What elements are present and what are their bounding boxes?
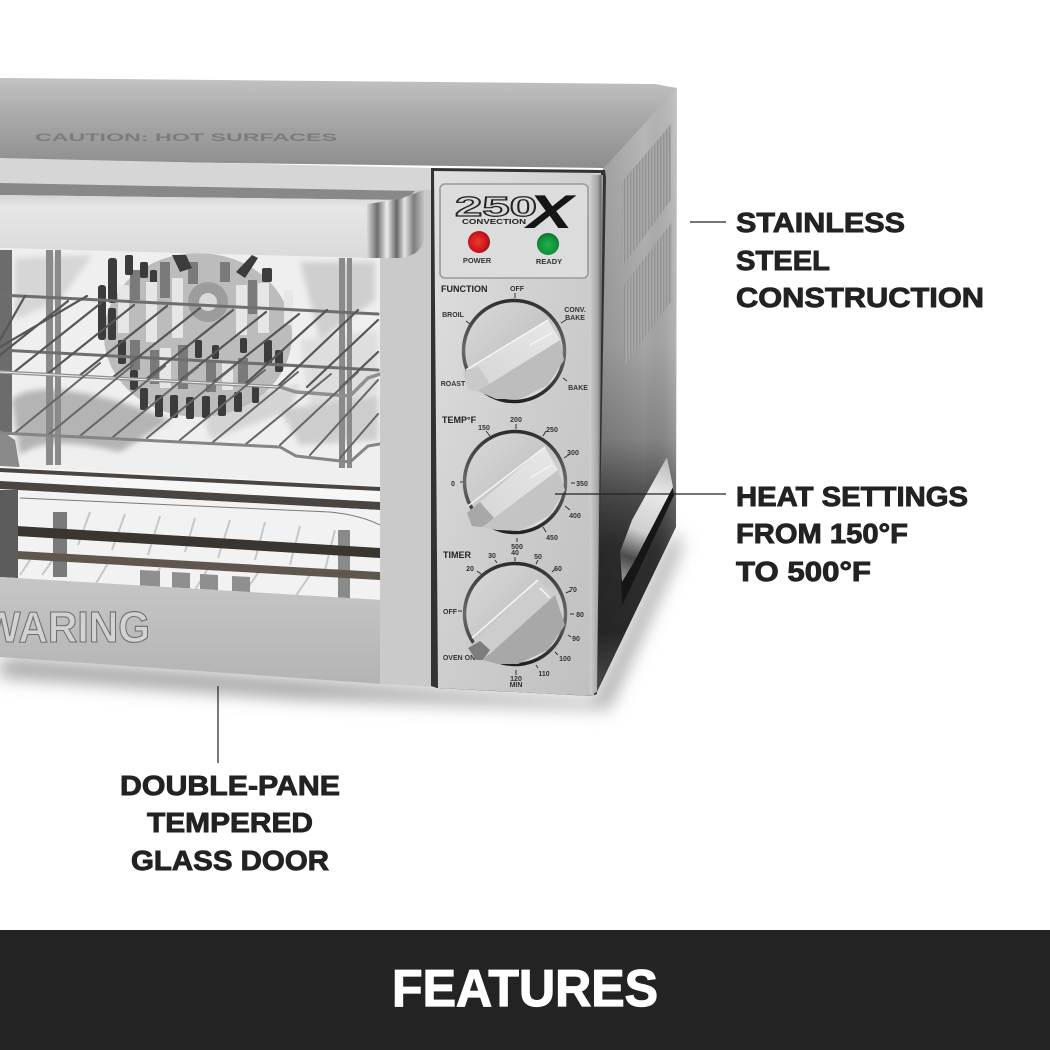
ready light: READY (536, 257, 562, 266)
callout text: FROM 150°F (736, 518, 908, 549)
function dial (441, 284, 588, 402)
callout text: TO 500°F (736, 556, 871, 587)
250X logo: CONVECTION (462, 219, 526, 226)
callout text: STAINLESS (736, 207, 905, 238)
door upper frame (0, 158, 434, 195)
timer dial: OFF (443, 609, 458, 616)
callout: stainless steel construction (690, 207, 984, 313)
convection fan (98, 253, 293, 419)
250X logo: 250 (455, 191, 537, 222)
oven window (0, 245, 385, 605)
temperature dial: 450 (546, 535, 558, 542)
callout: heat settings (555, 481, 968, 587)
lower window rails and tubes (0, 466, 380, 600)
callout text: STEEL (736, 245, 830, 276)
oven side panel (597, 88, 677, 692)
timer dial: 70 (569, 587, 577, 594)
fan blades (118, 278, 293, 390)
function dial: FUNCTION (441, 284, 488, 294)
timer dial: 30 (488, 553, 496, 560)
temperature dial: 150 (478, 425, 490, 432)
door right stile (380, 190, 433, 687)
function dial: BAKE (565, 315, 585, 322)
dark fan gaps (98, 255, 283, 419)
callout text: HEAT SETTINGS (736, 481, 968, 512)
rack reflection (140, 570, 250, 592)
dark left wall reflection (0, 490, 18, 580)
leader line (555, 493, 726, 495)
callout text (120, 770, 340, 876)
oven illustration (0, 78, 680, 708)
function dial: BAKE (568, 385, 588, 392)
callout text: CONSTRUCTION (736, 282, 984, 313)
timer dial: MIN (510, 682, 522, 689)
window reflections (12, 255, 378, 455)
indicator plate (440, 184, 588, 278)
door handle (0, 183, 424, 258)
side vents (622, 124, 672, 366)
control panel (431, 168, 606, 696)
power light: POWER (463, 256, 492, 265)
door lower panel with logo (0, 577, 382, 684)
callout text: TEMPERED (147, 807, 313, 838)
callout: glass door (120, 686, 340, 876)
fan hub (188, 282, 228, 322)
ready light (536, 233, 562, 266)
timer dial: 20 (466, 566, 474, 573)
temperature dial (442, 415, 588, 551)
function dial: ROAST (441, 381, 466, 388)
timer dial: 50 (534, 554, 542, 561)
250X logo: X (523, 185, 577, 238)
timer dial: 100 (559, 656, 571, 663)
temperature dial: 300 (567, 450, 579, 457)
embossed caution text: CAUTION: HOT SURFACES (35, 132, 337, 144)
temperature dial: 250 (546, 427, 558, 434)
timer dial: 90 (572, 636, 580, 643)
callout text (736, 481, 968, 587)
leader line (217, 686, 219, 763)
timer dial: OVEN ON (443, 655, 475, 662)
rear uprights (46, 250, 352, 468)
function dial: CONV. (564, 307, 586, 314)
side carry handle (620, 457, 674, 606)
timer dial: TIMER (443, 550, 471, 560)
temperature dial: 400 (569, 513, 581, 520)
wire racks (0, 295, 380, 462)
function dial: BROIL (442, 312, 465, 319)
timer dial: 80 (576, 612, 584, 619)
timer dial: 110 (538, 671, 550, 678)
temperature dial: 500 (511, 544, 523, 551)
callout text: DOUBLE-PANE (120, 770, 340, 801)
callout text (736, 207, 984, 313)
timer dial: 120 (510, 676, 522, 683)
250X logo (455, 185, 577, 238)
footer title: FEATURES (392, 960, 658, 1018)
callout text: GLASS DOOR (131, 845, 329, 876)
temperature dial: 350 (576, 481, 588, 488)
mid-tone fan shading (130, 262, 257, 392)
dark inner left wall (0, 250, 12, 435)
temperature dial: 0 (451, 481, 455, 488)
footer band (0, 930, 1050, 1050)
function dial: OFF (510, 286, 525, 293)
temperature dial: TEMP°F (442, 415, 477, 425)
oven top surface (0, 78, 677, 168)
leader line (690, 221, 726, 223)
timer dial: 60 (554, 566, 562, 573)
timer dial: 40 (511, 550, 519, 557)
floor shadow (0, 530, 680, 708)
power light (463, 231, 492, 265)
temperature dial: 200 (510, 417, 522, 424)
timer dial (443, 550, 584, 689)
